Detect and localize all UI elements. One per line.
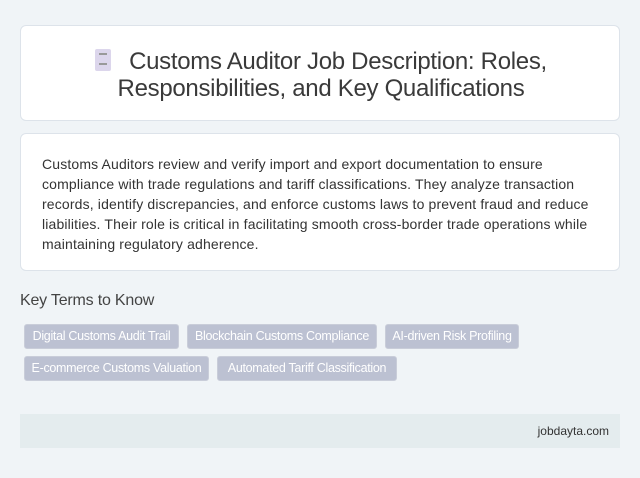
tag: Blockchain Customs Compliance <box>195 329 369 343</box>
title: Customs Auditor Job Description: Roles, <box>129 48 547 75</box>
title card <box>20 25 620 121</box>
tag <box>385 324 519 349</box>
description text: Customs Auditors review and verify import and export documentation to ensure compliance with trade regulations and tariff classifications. They analyze transaction records, identify discrepancies, and enforce customs laws to prevent fraud and reduce liabilities. Their role is critical in facilitating smooth cross-border trade operations while maintaining regulatory adherence. <box>42 156 589 252</box>
tag: E-commerce Customs Valuation <box>32 361 201 375</box>
footer <box>20 414 620 448</box>
tag <box>217 356 397 381</box>
title <box>95 48 547 102</box>
tag: AI-driven Risk Profiling <box>392 329 512 343</box>
tag <box>187 324 377 349</box>
tag <box>24 324 179 349</box>
description card <box>20 133 620 271</box>
heading: key terms: Key Terms to Know <box>20 292 154 309</box>
tags <box>24 324 519 381</box>
tag: Automated Tariff Classification <box>228 361 386 375</box>
icon: document scroll <box>95 49 111 71</box>
tag <box>24 356 209 381</box>
footer text: jobdayta.com <box>538 424 609 438</box>
title: Responsibilities, and Key Qualifications <box>118 75 524 102</box>
tag: Digital Customs Audit Trail <box>33 329 170 343</box>
